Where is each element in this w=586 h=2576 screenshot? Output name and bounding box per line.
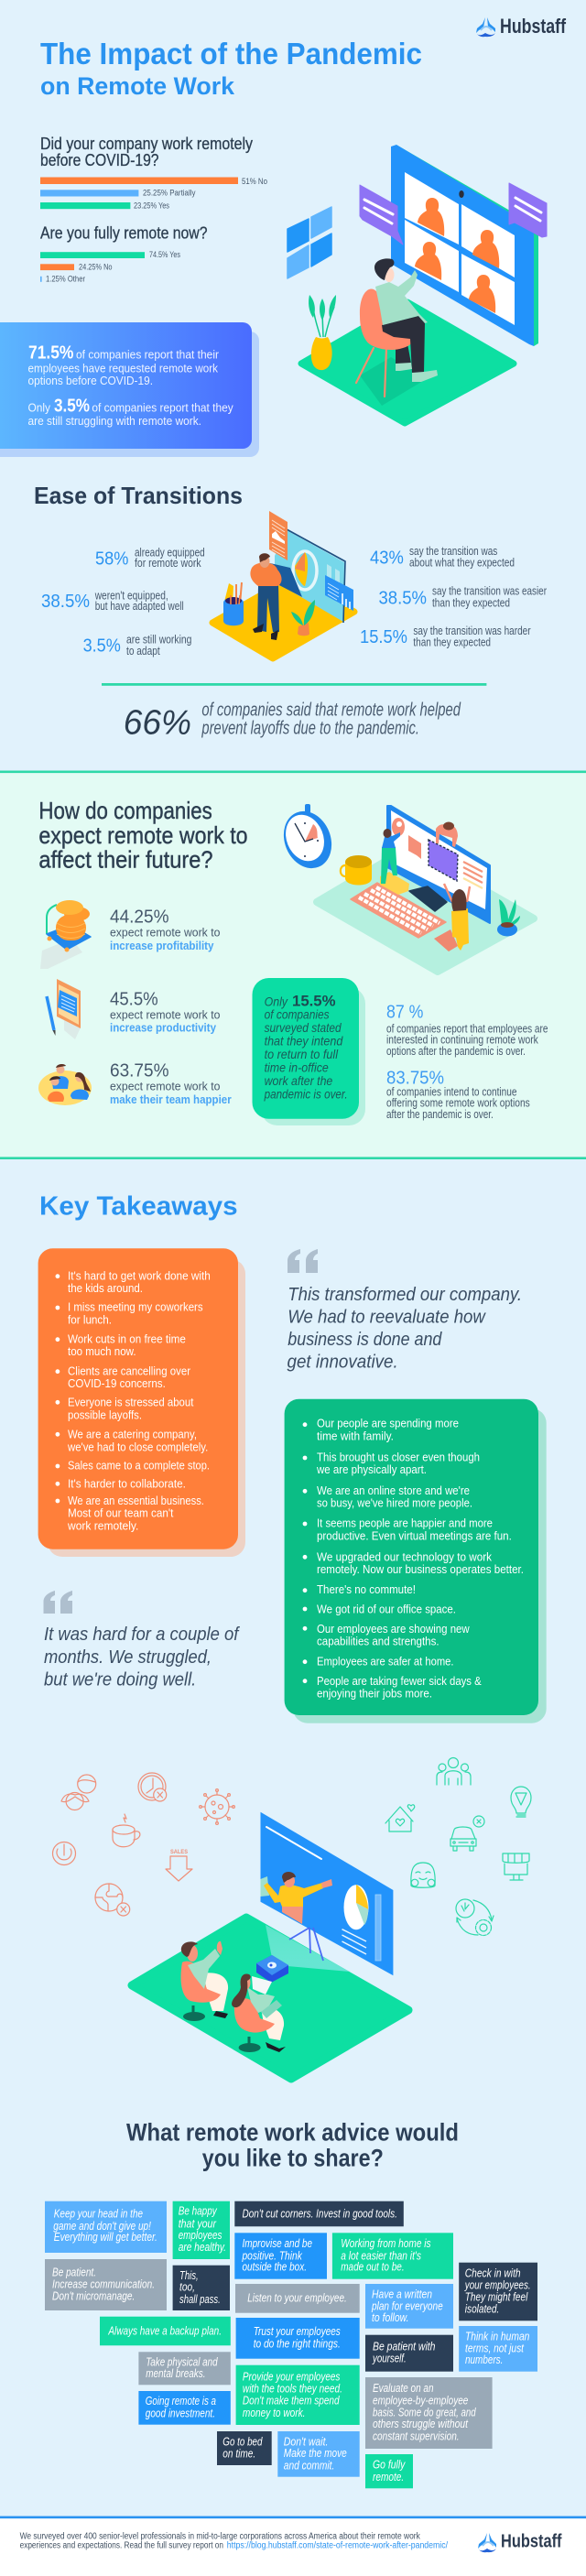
panel: negative takeaways: for lunch. [68,1312,112,1326]
heading: remote work advice [126,2118,459,2171]
stat: team happier: make their team happier [110,1092,232,1106]
panel: negative takeaways: Everyone is stressed about [68,1396,194,1409]
advice tile: bed: on time. [222,2447,255,2461]
stats: equipped: for remote work [135,556,201,570]
panel: positive takeaways: productive. Even virtual meetings are fun. [317,1528,512,1542]
callout: return to office: that they intend [265,1034,343,1049]
advice tile: be patient: Increase communication. [52,2277,155,2290]
stats: transition expectations: than they expected [413,636,491,649]
icon: quote marks [44,1591,72,1614]
advice tile: backup plan [100,2317,231,2345]
advice tile: don't wait: Don't wait. [284,2434,328,2448]
callout: 66% prevented layoffs: of companies said that remote work helped [201,701,461,721]
title: on Remote Work [40,72,235,100]
heading: ease of transitions: Ease of Transitions [34,482,243,509]
callout: return to office: surveyed stated [265,1020,342,1035]
heading: future of remote work: expect remote work to [38,821,248,849]
stat: increase profitability: increase profitability [110,939,214,952]
bar chart: worked remotely before COVID-19: before COVID-19? [40,151,159,169]
advice tile: this too shall pass: too, [179,2280,195,2294]
advice tile: don't wait: Make the move [284,2446,347,2460]
panel: positive takeaways: we are physically apart. [316,1462,427,1476]
stats: continuing remote work: 83.75% [386,1069,444,1089]
icon: stopwatch [276,804,340,875]
stats: equipped [41,546,205,658]
stats: continuing remote work: of companies intend to continue [386,1084,516,1098]
advice tile: patient with yourself [365,2335,453,2372]
panel: negative takeaways: the kids around. [68,1281,143,1295]
callout: return to office: Only [265,994,288,1008]
stat: increase productivity: increase productivity [110,1021,217,1035]
footer text: We surveyed over 400 senior-level professionals in mid-to-large corporations across America about their remote work [20,2532,421,2542]
advice tile: working from home: a lot easier than it's [341,2248,421,2262]
callout: return to office: work after the [265,1073,332,1088]
title: The Impact of the Pandemic [40,37,422,71]
advice tile: going remote [138,2391,231,2425]
advice tile: going remote: good investment. [146,2407,215,2420]
advice tile: provide tools [236,2365,360,2425]
advice tile: listen [235,2284,360,2313]
callout: remote work requests: are still struggling with remote work. [27,414,201,428]
stat: increase profitability: 44.25% [110,908,169,928]
panel: positive takeaways: Employees are safer at home. [317,1655,454,1668]
logo: Hubstaff footer: Hubstaff [501,2532,562,2552]
bar chart: fully remote now [40,224,207,284]
advice tile: improvise: positive. Think [242,2248,303,2262]
advice tile: improvise [234,2233,327,2279]
advice tile: be happy: Be happy [179,2204,218,2218]
stats: equipped: but have adapted well [95,599,184,613]
heading: future of remote work: How do companies [38,797,212,824]
advice tile: bed [217,2431,272,2465]
panel: negative takeaways: Most of our team can't [68,1506,174,1520]
advice tile: evaluate: constant supervision. [373,2429,460,2443]
logo: Hubstaff footer [478,2532,562,2552]
callout: remote work requests [0,322,259,457]
stat: increase productivity: 45.5% [110,989,158,1009]
callout: remote work requests: options before COVID-19. [27,374,153,387]
stats: continuing remote work: interested in continuing remote work [386,1032,538,1046]
advice tile: breaks: mental breaks. [146,2366,205,2380]
advice tile: going remote: Going remote is a [146,2394,216,2408]
advice tile: be happy: that your [179,2216,217,2230]
logo: Hubstaff top: Hubstaff [500,15,567,38]
advice tile: go fully remote: remote. [373,2470,404,2484]
advice tile: be happy: are healthy. [179,2240,226,2254]
footer text [20,2532,448,2551]
illustration: video call on wall screen [288,144,547,423]
panel: positive takeaways: remotely. Now our business operates better. [317,1562,524,1576]
heading: future of remote work: affect their future? [38,845,213,873]
advice tile: human terms: terms, not just [465,2342,525,2355]
stats: transition expectations [360,544,548,649]
callout: return to office: time in-office [265,1060,329,1075]
panel: positive takeaways [285,1399,547,1723]
panel: positive takeaways: Our people are spending more [317,1417,459,1430]
panel: negative takeaways: Clients are cancelling over [68,1364,191,1378]
panel: negative takeaways: we've had to close completely. [67,1440,208,1453]
advice tile: trust: to do the right things. [254,2336,341,2350]
quote: hard for a couple of months: months. We struggled, [44,1647,212,1668]
callout: remote work requests: 71.5% [28,343,74,364]
advice tile: keep your head [45,2201,167,2253]
bar chart: fully remote now: 24.25% No [79,263,112,272]
callout: return to office: pandemic is over. [264,1087,348,1102]
advice tile: working from home [332,2233,453,2279]
callout: return to office: to return to full [265,1047,339,1061]
bar chart: fully remote now: 1.25% Other [46,275,85,284]
panel: negative takeaways: I miss meeting my coworkers [68,1300,203,1314]
advice tile: check in: They might feel [465,2290,528,2304]
callout: 66% prevented layoffs [124,701,461,743]
advice tile: don't cut corners: Don't cut corners. Invest in good tools. [242,2206,397,2220]
footer text: experiences and expectations. Read the full survey report on [20,2541,223,2551]
illustration: man with monitor on yellow floor [212,511,354,658]
stat: increase profitability: expect remote work to [110,926,220,940]
stat: team happier: expect remote work to [110,1080,220,1093]
panel: negative takeaways: We are a catering company, [68,1428,197,1441]
advice tile: bed: Go to bed [222,2434,263,2448]
panel: positive takeaways: We upgraded our technology to work [317,1549,492,1563]
heading: future of remote work [38,797,248,873]
panel: negative takeaways: possible layoffs. [68,1408,142,1421]
quote: transformed our company: get innovative. [288,1352,398,1372]
advice tile: provide tools: money to work. [243,2406,306,2419]
stats: continuing remote work: offering some remote work options [386,1095,530,1109]
panel: negative takeaways: It's hard to get work done with [68,1269,211,1283]
bar chart: worked remotely before COVID-19: 51% No [242,177,267,186]
stat: increase profitability [40,900,220,969]
quote: transformed our company: This transformed our company. [288,1285,522,1305]
icons: positives line icons [385,1758,531,1936]
advice tile: trust: Trust your employees [254,2324,341,2338]
panel: negative takeaways: COVID-19 concerns. [68,1376,166,1390]
bar chart: fully remote now: Are you fully remote now? [40,224,207,243]
advice tile: evaluate: employee-by-employee [373,2393,468,2407]
bar chart: worked remotely before COVID-19: 23.25% Yes [134,201,169,211]
advice tile: go fully remote [365,2454,413,2488]
advice tile: be patient: Be patient. [52,2266,96,2279]
advice tile: backup plan: Always have a backup plan. [108,2323,222,2337]
advice tile: human terms: numbers. [465,2353,503,2366]
advice tile: keep your head: Everything will get better. [54,2230,157,2244]
advice tile: check in: your employees. [464,2277,531,2291]
stats: continuing remote work: options after the pandemic is over. [386,1044,526,1058]
advice tile: breaks [138,2352,231,2385]
panel: positive takeaways: We are an online store and we're [317,1484,470,1497]
advice tile: keep your head: game and don't give up! [53,2219,151,2233]
advice tile: this too shall pass: shall pass. [179,2292,221,2306]
panel: positive takeaways: capabilities and strengths. [317,1634,440,1647]
advice tile: evaluate: Evaluate on an [373,2381,434,2395]
advice tile: be patient [45,2259,167,2310]
callout: return to office: of companies [265,1007,330,1022]
title [40,37,422,100]
advice tile: written plan: plan for everyone [371,2299,443,2313]
panel: positive takeaways: enjoying their jobs more. [317,1687,432,1701]
advice tile: check in [459,2263,537,2321]
heading: key takeaways: Key Takeaways [39,1192,238,1222]
stats: transition expectations: say the transition was harder [413,624,531,637]
bar chart: worked remotely before COVID-19 [40,135,267,211]
quote: transformed our company: business is done and [288,1330,442,1350]
quote: hard for a couple of months [44,1625,241,1690]
logo: Hubstaff top [476,15,567,38]
callout: remote work requests: 3.5% [54,396,90,416]
bar chart: worked remotely before COVID-19: Did your company work remotely [40,135,253,153]
panel: negative takeaways: work remotely. [67,1518,138,1532]
advice tile: provide tools: with the tools they need. [243,2382,342,2396]
panel: positive takeaways: Our employees are showing new [317,1622,470,1636]
panel: positive takeaways: It seems people are happier and more [317,1516,493,1530]
advice tile: don't wait [277,2431,360,2477]
advice tile: improvise: outside the box. [242,2260,307,2274]
quote: transformed our company [288,1285,522,1372]
callout: remote work requests: of companies report that they [92,401,233,414]
icon: quote marks [288,1249,318,1273]
advice tile: evaluate: basis. Some do great, and [373,2406,476,2419]
callout: remote work requests: of companies report that their [76,348,220,361]
advice tile: check in: Check in with [465,2266,521,2280]
advice tile: evaluate [365,2377,493,2449]
panel: positive takeaways: This brought us closer even though [317,1450,480,1463]
bar chart: fully remote now: 74.5% Yes [149,250,180,259]
bar chart: worked remotely before COVID-19: 25.25% Partially [143,189,196,198]
advice tile: keep your head: Keep your head in the [54,2206,143,2220]
advice tile: evaluate: others struggle without [373,2417,469,2430]
heading: remote work advice: you like to share? [202,2144,384,2171]
advice tile: breaks: Take physical and [146,2354,218,2368]
panel: positive takeaways: People are taking fewer sick days & [317,1674,482,1688]
illustration: team at desktop monitor [317,806,534,972]
stat: increase productivity [47,979,220,1039]
quote: transformed our company: We had to reevaluate how [288,1307,486,1327]
stats: continuing remote work [386,1003,548,1121]
advice tile: written plan [365,2284,453,2329]
advice tile: human terms: Think in human [465,2329,529,2342]
illustration: presentation on projector [132,1812,408,2079]
callout: 66% prevented layoffs: prevent layoffs due to the pandemic. [201,719,419,739]
panel: negative takeaways: Sales came to a complete stop. [68,1459,210,1473]
panel: positive takeaways: so busy, we've hired more people. [317,1496,472,1510]
panel: negative takeaways: Work cuts in on free time [68,1331,186,1345]
stats: equipped: 38.5% [41,592,90,612]
panel: negative takeaways [38,1248,245,1557]
stats: continuing remote work: 87 % [386,1003,424,1023]
advice tile: written plan: to follow. [372,2310,408,2324]
advice tile: working from home: Working from home is [341,2236,431,2250]
advice tile: don't cut corners [234,2201,404,2226]
stats: equipped: weren't equipped, [94,589,168,603]
icons: challenges line icons: SALES [170,1849,189,1855]
stats: continuing remote work: after the pandemic is over. [386,1107,494,1121]
stats: transition expectations: say the transition was easier [432,583,548,597]
stat: team happier: 63.75% [110,1061,169,1081]
panel: negative takeaways: too much now. [68,1344,136,1358]
stats: transition expectations: than they expected [432,595,510,609]
panel: positive takeaways: time with family. [317,1429,394,1442]
advice tile: be happy: employees [179,2228,222,2242]
advice tile: working from home: made out to be. [341,2260,405,2274]
advice tile: trust [236,2318,360,2359]
stats: transition expectations: 43% [370,548,404,568]
heading: remote work advice: What remote work advice would [126,2118,459,2146]
stats: equipped: to adapt [126,644,160,658]
stats: transition expectations: 38.5% [379,588,427,608]
stats: transition expectations: about what they expected [409,556,515,570]
stats: equipped: already equipped [135,546,205,560]
panel: negative takeaways: We are an essential business. [68,1494,204,1507]
advice tile: written plan: Have a written [372,2287,432,2300]
advice tile: don't wait: and commit. [284,2458,334,2472]
advice tile: human terms [459,2326,537,2372]
stat: increase productivity: expect remote work to [110,1007,220,1021]
callout: remote work requests: employees have requested remote work [27,362,218,375]
stats: equipped: are still working [126,632,191,646]
stats: transition expectations: say the transition was [409,544,498,558]
callout: return to office [253,978,365,1125]
stats: equipped: 58% [95,549,129,570]
stats: transition expectations: 15.5% [360,627,407,647]
advice tile: provide tools: Don't make them spend [243,2393,340,2407]
advice tile: go fully remote: Go fully [373,2457,407,2471]
advice tile: be patient: Don't micromanage. [52,2289,135,2303]
advice tile: improvise: Improvise and be [242,2236,312,2250]
footer text: https://blog.hubstaff.com/state-of-remote-work-after-pandemic/ [227,2541,448,2551]
icons: challenges line icons [53,1773,234,1916]
stat: team happier [38,1061,232,1106]
advice tile: patient with yourself: yourself. [372,2352,407,2365]
advice tile: listen: Listen to your employee. [247,2290,347,2304]
advice tile: be happy [173,2201,230,2259]
advice tile: this too shall pass [173,2266,230,2310]
panel: positive takeaways: There's no commute! [317,1582,416,1596]
advice tile: this too shall pass: This, [179,2268,199,2282]
advice tile: provide tools: Provide your employees [243,2369,341,2383]
callout: 66% prevented layoffs: 66% [124,704,191,743]
panel: negative takeaways: It's harder to collaborate. [68,1476,186,1490]
callout: remote work requests: Only [27,401,50,414]
advice tile: patient with yourself: Be patient with [373,2340,436,2353]
advice tile: check in: isolated. [465,2302,499,2316]
stats: equipped: 3.5% [83,636,121,656]
quote: hard for a couple of months: It was hard for a couple of [44,1625,241,1645]
panel: positive takeaways: We got rid of our office space. [317,1602,456,1615]
callout: return to office: 15.5% [292,992,335,1009]
quote: hard for a couple of months: but we're doing well. [44,1669,196,1690]
